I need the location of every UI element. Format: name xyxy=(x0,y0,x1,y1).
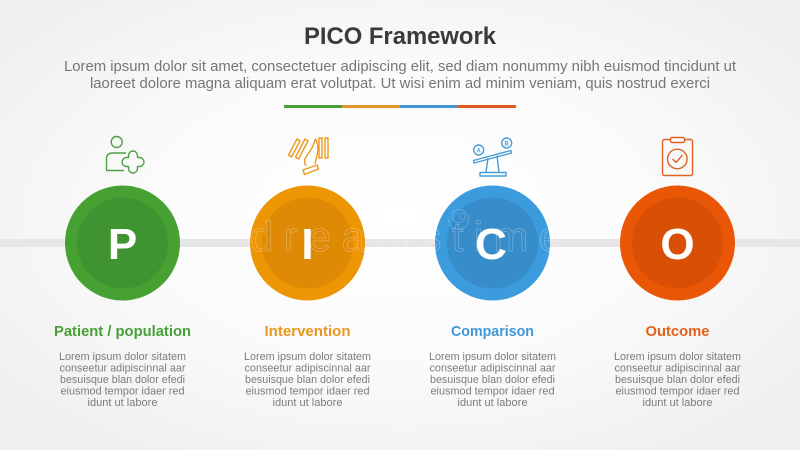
circle C xyxy=(435,186,550,300)
column 2: intervention: besuisque blan dolor efedi xyxy=(245,374,370,386)
icon: seesaw balance A and B xyxy=(474,138,512,176)
column 3: comparison: besuisque blan dolor efedi xyxy=(430,374,555,386)
circle P: P xyxy=(108,220,137,269)
column 2: intervention: Lorem ipsum dolor sitatem xyxy=(244,351,371,363)
icon: patient with plus xyxy=(106,136,144,173)
circle O xyxy=(620,186,735,300)
column 2: intervention: conseetur adipiscinnal aar xyxy=(244,362,371,374)
column 3: comparison xyxy=(429,323,556,409)
watermark: dreamstime xyxy=(250,213,562,260)
column 1: patient / population: eiusmod tempor idaer red xyxy=(60,386,184,398)
colored title divider xyxy=(284,105,516,108)
column 4: outcome: Outcome xyxy=(646,323,710,340)
column 1: patient / population: besuisque blan dolor efedi xyxy=(60,374,185,386)
circle I: I xyxy=(301,220,314,269)
icon: seesaw balance A and B: A xyxy=(477,148,482,154)
icon: clipboard with check xyxy=(662,138,692,176)
column 3: comparison: Lorem ipsum dolor sitatem xyxy=(429,351,556,363)
column 4: outcome: Lorem ipsum dolor sitatem xyxy=(614,351,741,363)
column 3: comparison: eiusmod tempor idaer red xyxy=(430,386,554,398)
horizontal connector line xyxy=(0,239,800,247)
column 4: outcome: besuisque blan dolor efedi xyxy=(615,374,740,386)
column 2: intervention: Intervention xyxy=(264,323,350,340)
circle P xyxy=(65,186,180,300)
column 1: patient / population: conseetur adipiscinnal aar xyxy=(60,362,186,374)
column 2: intervention xyxy=(244,323,371,409)
circle C: C xyxy=(475,220,507,269)
column 2: intervention: eiusmod tempor idaer red xyxy=(246,386,370,398)
column 4: outcome: eiusmod tempor idaer red xyxy=(616,386,740,398)
title: PICO Framework xyxy=(304,23,497,50)
column 3: comparison: idunt ut labore xyxy=(458,397,528,409)
subtitle text: Lorem ipsum dolor sit amet, consectetuer adipiscing elit, sed diam nonummy nibh euismod tincidunt ut xyxy=(64,59,736,75)
subtitle text xyxy=(64,59,736,92)
column 1: patient / population: idunt ut labore xyxy=(88,397,158,409)
column 4: outcome: idunt ut labore xyxy=(642,397,712,409)
column 4: outcome xyxy=(614,323,741,409)
column 1: patient / population xyxy=(54,323,191,409)
circle O: O xyxy=(660,220,695,269)
circle I xyxy=(250,186,365,300)
column 3: comparison: conseetur adipiscinnal aar xyxy=(430,362,556,374)
column 1: patient / population: Patient / population xyxy=(54,323,191,340)
icon: seesaw balance A and B: B xyxy=(505,141,510,147)
subtitle text: laoreet dolore magna aliquam erat volutpat. Ut wisi enim ad minim veniam, quis nostrud exerci xyxy=(90,76,710,92)
column 1: patient / population: Lorem ipsum dolor sitatem xyxy=(59,351,186,363)
column 3: comparison: Comparison xyxy=(451,323,534,340)
column 2: intervention: idunt ut labore xyxy=(272,397,342,409)
column 4: outcome: conseetur adipiscinnal aar xyxy=(614,362,741,374)
icon: hand with falling dominoes xyxy=(288,138,328,174)
